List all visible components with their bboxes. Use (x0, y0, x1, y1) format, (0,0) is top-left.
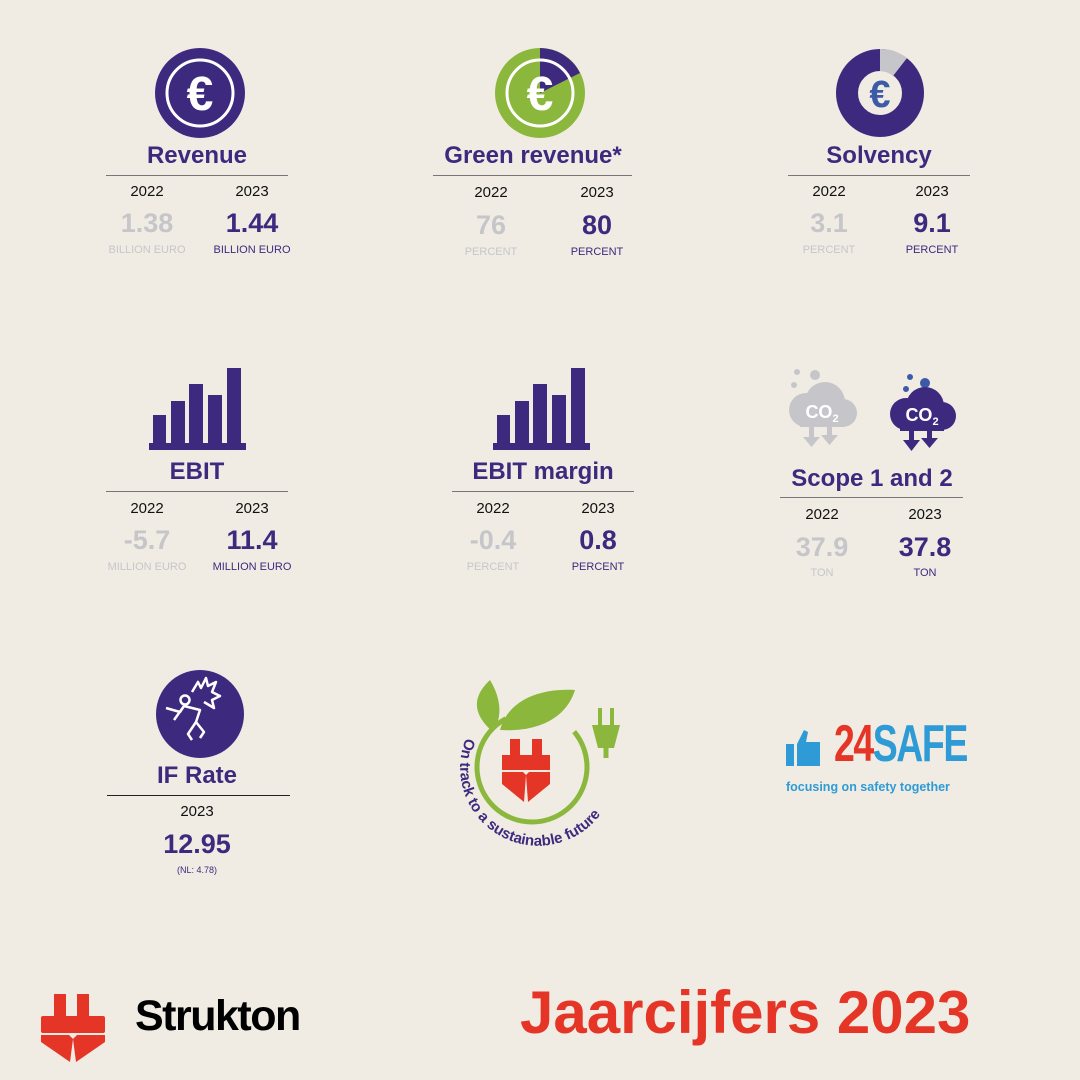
block: solvency values: PERCENT (803, 244, 855, 256)
icon: solvency donut (836, 49, 924, 137)
block: EBIT values (108, 500, 291, 573)
logo: on track to a sustainable future (460, 680, 620, 846)
block: solvency values (803, 183, 958, 256)
icon: IF rate injury (156, 670, 244, 758)
block: revenue values: 1.44 (226, 208, 278, 238)
block: EBIT margin values: PERCENT (467, 561, 519, 573)
icon: revenue euro: € (187, 68, 213, 121)
logo: on track to a sustainable future: On track to a sustainable future (460, 740, 600, 846)
logo: 24SAFE (786, 715, 967, 794)
block: IF rate value: 12.95 (163, 829, 231, 859)
block: solvency values: PERCENT (906, 244, 958, 256)
block: EBIT values: 2023 (235, 500, 269, 517)
title: Jaarcijfers 2023: Jaarcijfers 2023 (520, 979, 970, 1046)
block: EBIT margin values (467, 500, 624, 573)
block: revenue values (108, 183, 291, 256)
heading: EBIT margin: EBIT margin (472, 458, 614, 485)
icon: EBIT margin bars (493, 368, 590, 450)
block: EBIT values: 11.4 (226, 525, 278, 555)
block: green revenue values: 2023 (580, 184, 614, 201)
block: scope values: TON (810, 567, 834, 579)
block: EBIT margin values: 0.8 (579, 525, 617, 555)
heading: EBIT: EBIT (170, 458, 224, 485)
logo: Strukton (41, 992, 300, 1062)
block: green revenue values: 76 (476, 210, 506, 240)
block: EBIT values: 2022 (130, 500, 164, 517)
block: revenue values: BILLION EURO (213, 244, 291, 256)
block: IF rate value: (NL: 4.78) (177, 865, 217, 875)
heading: solvency: Solvency (826, 142, 932, 169)
block: solvency values: 2023 (915, 183, 949, 200)
logo: 24SAFE: focusing on safety together (786, 780, 950, 794)
block: green revenue values: PERCENT (571, 246, 623, 258)
icon: CO2 clouds (789, 369, 956, 451)
block: revenue values: BILLION EURO (108, 244, 186, 256)
icon: CO2 clouds: 2 (932, 416, 939, 428)
heading: green revenue: Green revenue* (444, 142, 622, 169)
block: revenue values: 1.38 (121, 208, 173, 238)
icon: green revenue pie (495, 48, 585, 138)
block: solvency values: 2022 (812, 183, 846, 200)
block: EBIT values: MILLION EURO (108, 561, 186, 573)
block: EBIT margin values: PERCENT (572, 561, 624, 573)
block: green revenue values: 80 (582, 210, 612, 240)
block: revenue values: 2022 (130, 183, 164, 200)
heading: IF rate: IF Rate (157, 762, 237, 789)
block: EBIT margin values: 2023 (581, 500, 615, 517)
block: scope values: 37.9 (796, 532, 848, 562)
icon: solvency donut: € (869, 74, 891, 116)
icon: EBIT bars (149, 368, 246, 450)
icon: green revenue pie: € (527, 68, 553, 121)
block: green revenue values (465, 184, 623, 258)
icon: revenue euro (155, 48, 245, 138)
icon: CO2 clouds: 2 (832, 413, 839, 425)
icon: CO2 clouds: CO (805, 402, 832, 422)
block: green revenue values: 2022 (474, 184, 508, 201)
logo: 24SAFE: 24SAFE (834, 715, 967, 773)
block: scope values: TON (913, 567, 937, 579)
block: revenue values: 2023 (235, 183, 269, 200)
block: scope values: 37.8 (899, 532, 951, 562)
block: EBIT values: -5.7 (124, 525, 170, 555)
block: IF rate value (163, 803, 231, 875)
block: EBIT values: MILLION EURO (213, 561, 291, 573)
block: scope values: 2022 (805, 506, 839, 523)
heading: scope 1 and 2: Scope 1 and 2 (791, 465, 953, 492)
block: EBIT margin values: -0.4 (470, 525, 516, 555)
block: scope values: 2023 (908, 506, 942, 523)
logo: Strukton: Strukton (135, 992, 300, 1040)
heading: revenue: Revenue (147, 142, 247, 169)
block: IF rate value: 2023 (180, 803, 214, 820)
block: green revenue values: PERCENT (465, 246, 517, 258)
block: solvency values: 3.1 (810, 208, 848, 238)
block: scope values (796, 506, 951, 579)
block: solvency values: 9.1 (913, 208, 951, 238)
block: EBIT margin values: 2022 (476, 500, 510, 517)
icon: CO2 clouds: CO (905, 405, 932, 425)
